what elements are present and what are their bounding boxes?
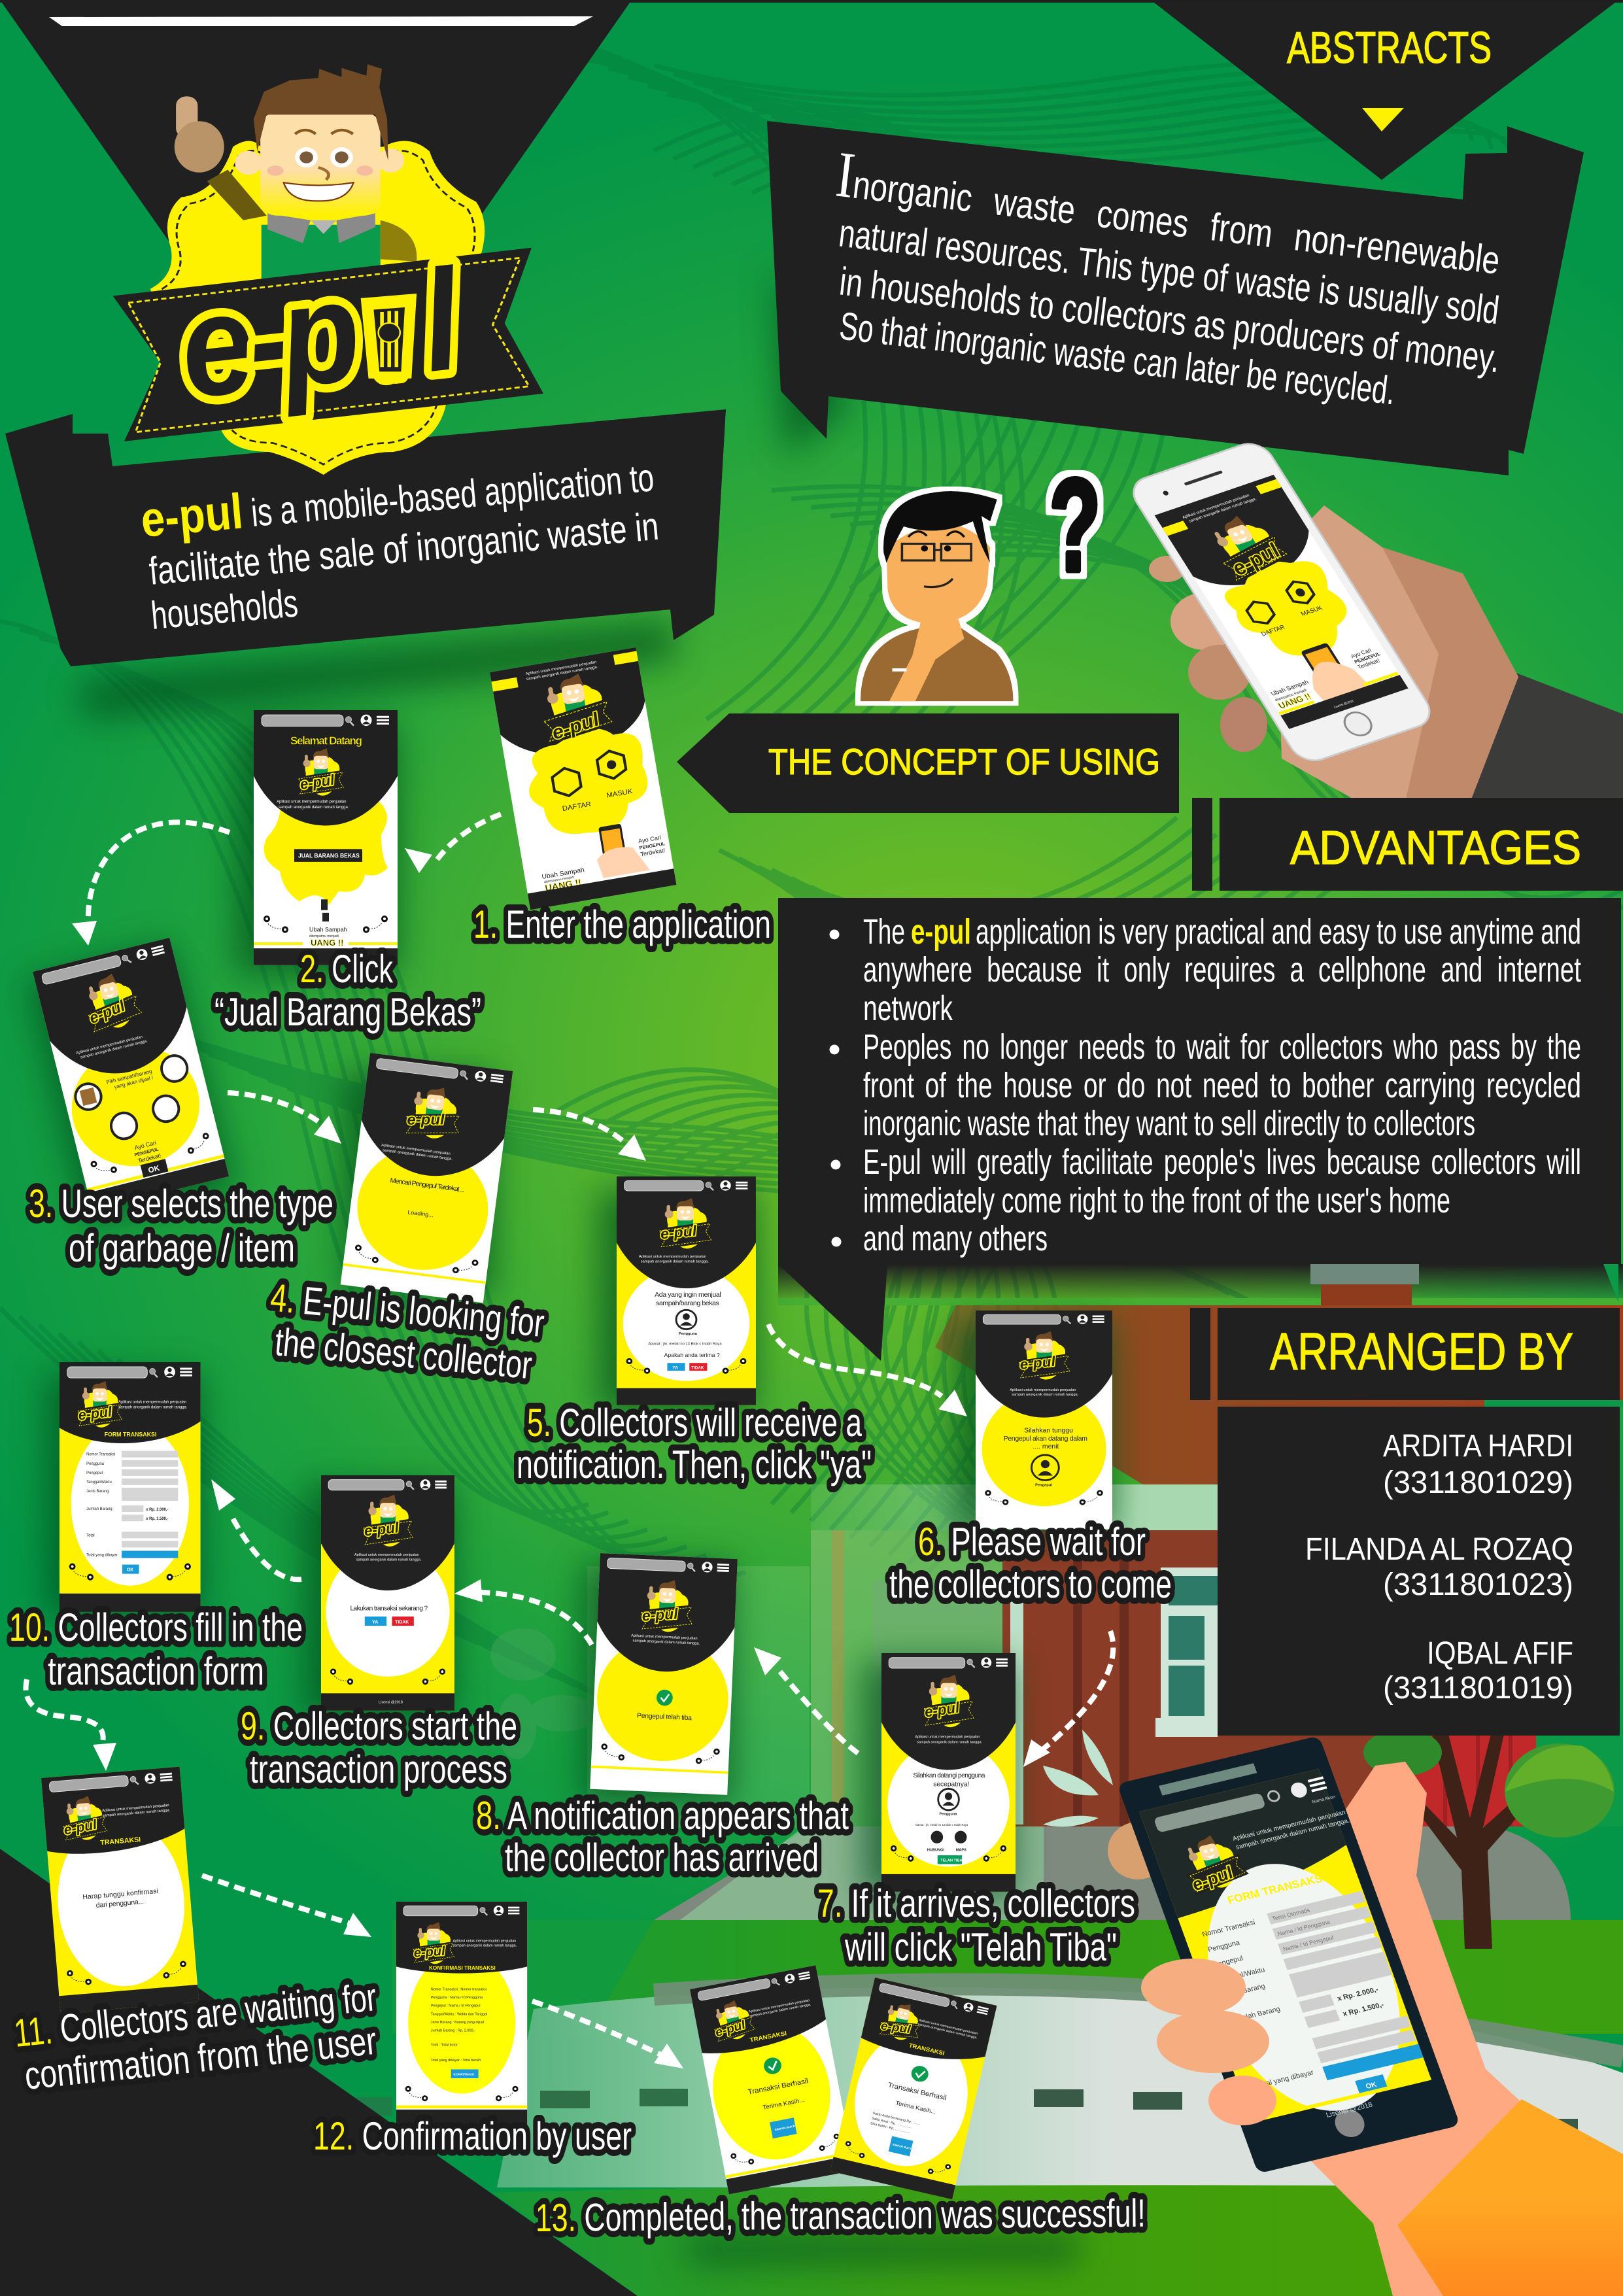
phone 13b: transaction success with balance screen: Sisa Saldo : Rp. ................ — [870, 2121, 910, 2134]
phone 9: start transaction screen: YA — [372, 1619, 379, 1624]
photo: hand holding smartphone: Lisensi @2018 — [1333, 699, 1355, 710]
phone 13b: transaction success with balance screen: Aplikasi untuk mempermudah penjualan — [918, 2019, 978, 2036]
phone 10: transaction form screen: Pengepul — [86, 1471, 103, 1475]
illustration: hand holding phone with transaction form: Jumlah Barang — [1232, 2005, 1282, 2024]
phone 12: user confirmation screen: Aplikasi untuk mempermudah penjualan — [453, 1939, 516, 1943]
heading: the concept of using: THE CONCEPT OF USING — [768, 741, 1160, 782]
phone 3: select item screen: Pilih sampah/barang — [106, 1069, 152, 1086]
phone 13b: transaction success with balance screen: Saldo Anda berkurang Rp. ........ — [872, 2112, 921, 2126]
step 5 label: notification. Then, click "ya" — [517, 1443, 872, 1486]
illustration: hand holding phone with transaction form: FORM TRANSAKSI — [1225, 1872, 1327, 1906]
phone 3: select item screen: Ayo Cari — [134, 1139, 157, 1151]
step 2 label: “Jual Barang Bekas” — [214, 990, 481, 1034]
phone 3: select item screen: sampah anorganik dalam rumah tangga. — [80, 1039, 148, 1060]
phone 11: waiting confirmation screen — [41, 1767, 199, 2013]
phone 5: collector notification screen: YA — [672, 1366, 678, 1370]
phone 10: transaction form screen: x Rp. 1.500,- — [146, 1517, 169, 1521]
phone 2: welcome screen: JUAL BARANG BEKAS — [298, 853, 360, 859]
phone 10: transaction form screen: FORM TRANSAKSI — [105, 1431, 156, 1438]
phone 10: transaction form screen: Jumlah Barang — [86, 1507, 112, 1511]
character: thinking man — [861, 491, 1014, 701]
phone 13b: transaction success with balance screen: Transaksi Berhasil — [887, 2082, 947, 2102]
illustration: hand holding phone with transaction form: Total yang dibayar — [1256, 2068, 1315, 2089]
illustration: hand holding phone with transaction form: Pengepul — [1212, 1955, 1244, 1969]
phone 11: waiting confirmation screen: Harap tunggu konfirmasi — [82, 1887, 158, 1901]
illustration: hand holding phone with transaction form: Lisensi @2018 — [1325, 2101, 1374, 2119]
phone 1: start screen: Aplikasi untuk mempermudah penjualan — [525, 660, 597, 676]
phone 4: searching screen — [341, 1053, 513, 1303]
phone 7: collector arrives screen: HUBUNGI — [927, 1848, 944, 1852]
illustration: hand holding phone with transaction form: Nomor Transaksi — [1201, 1919, 1256, 1938]
logo: e-pul mascot and ribbon — [113, 64, 543, 475]
phone 2: welcome screen: Selamat Datang — [290, 734, 362, 747]
phone 12: user confirmation screen: Total : Total kotor — [431, 2043, 458, 2047]
phone 6: please wait screen: e-pul — [1019, 1353, 1057, 1373]
heading: advantages — [1192, 798, 1623, 891]
photo: hand holding smartphone: Ayo Cari — [1349, 647, 1373, 659]
phone 4: searching screen: Mencari Pengepul Terdekat ... — [390, 1176, 465, 1194]
phone 1: start screen: Ubah Sampah — [541, 866, 585, 881]
phone 13a: transaction success screen: sampah anorganik dalam rumah tangga. — [749, 2003, 811, 2018]
phone 11: waiting confirmation screen: dari pengguna... — [95, 1898, 144, 1910]
illustration: hand holding phone with transaction form: Total — [1246, 2051, 1263, 2062]
step 10 label — [9, 1605, 303, 1693]
phone 13b: transaction success with balance screen: SIMPAN BUKTI — [892, 2143, 912, 2150]
heading: the concept of using — [677, 713, 1179, 813]
phone 10: transaction form screen: x Rp. 2.000,- — [146, 1508, 169, 1512]
logo wordmark: - — [237, 258, 301, 421]
panel: authors: IQBAL AFIF — [1427, 1636, 1573, 1671]
illustration: hand holding phone with transaction form: Terisi Otomatis — [1271, 1907, 1311, 1922]
illustration: hand holding phone with transaction form: Nama / Id Pengepul — [1282, 1934, 1335, 1952]
phone 12: user confirmation screen: Pengguna : Nama / Id Pengguna — [431, 1996, 483, 2000]
phone 7: collector arrives screen: sampah anorganik dalam rumah tangga. — [917, 1740, 983, 1744]
phone 7: collector arrives screen — [881, 1653, 1016, 1892]
step 8 label: 8. A notification appears that — [476, 1794, 849, 1838]
panel: abstracts heading triangle — [1154, 3, 1615, 180]
panel: authors: (3311801019) — [1383, 1671, 1573, 1705]
panel: authors: (3311801023) — [1383, 1568, 1573, 1602]
illustration: hand holding phone with transaction form: Pengguna — [1206, 1939, 1242, 1954]
icon: recycle bin — [361, 294, 417, 379]
phone 5: collector notification screen: Pengguna — [679, 1332, 698, 1336]
phone 13a: transaction success screen: Terima Kasih... — [762, 2097, 805, 2112]
step 3 label — [29, 1182, 333, 1270]
abstract text — [832, 138, 1505, 413]
phone 13b: transaction success with balance screen: e-pul — [880, 2019, 912, 2036]
panel: abstracts heading triangle: ABSTRACTS — [1287, 23, 1492, 73]
phone 13a: transaction success screen: Transaksi Berhasil — [747, 2078, 809, 2097]
phone 3: select item screen: Terdekat! — [137, 1152, 162, 1164]
phone 8: collector arrived notification screen: sampah anorganik dalam rumah tangga. — [632, 1639, 700, 1646]
phone 13b: transaction success with balance screen: Terima Kasih... — [895, 2100, 936, 2115]
phone 10: transaction form screen: Tanggal/Waktu — [86, 1481, 112, 1484]
phone 6: please wait screen: .... menit — [1033, 1444, 1059, 1450]
panel: advantages list — [778, 898, 1621, 1361]
phone 7: collector arrives screen: Aplikasi untuk mempermudah penjualan — [915, 1736, 980, 1739]
phone 10: transaction form screen: Total yang dibayar — [86, 1553, 118, 1558]
step 7 label — [817, 1881, 1135, 1969]
phone 12: user confirmation screen: sampah anorganik dalam rumah tangga. — [453, 1944, 517, 1948]
step 4 label: the closest collector — [273, 1320, 534, 1387]
illustration: hand holding phone with transaction form: Nama Akun — [1312, 1794, 1336, 1804]
step 4 label — [269, 1275, 546, 1387]
phone 3: select item screen: yang akan dijual ! — [114, 1074, 154, 1090]
illustration: hand holding phone with transaction form: x Rp. 2.000,- — [1337, 1985, 1380, 2003]
phone 5: collector notification screen: Aplikasi untuk mempermudah penjualan — [639, 1255, 706, 1259]
illustration: hand holding phone with transaction form: Jenis Barang — [1223, 1982, 1267, 1999]
photo: hand holding smartphone: MASUK — [1300, 604, 1324, 618]
step 11 label — [12, 1975, 379, 2098]
step 9 label: transaction process — [250, 1747, 507, 1791]
phone 11: waiting confirmation screen: TRANSAKSI — [100, 1836, 141, 1847]
phone 1: start screen: UANG !! — [544, 877, 582, 893]
phone 12: user confirmation screen: Pengepul : Nama / Id Pengepul — [431, 2004, 480, 2008]
photo: hand holding smartphone: Aplikasi untuk mempermudah penjualan — [1182, 493, 1251, 520]
phone 10: transaction form screen: sampah anorganik dalam rumah tangga. — [118, 1405, 188, 1409]
description text: e-pul — [139, 483, 245, 548]
phone 13a: transaction success screen: TRANSAKSI — [749, 2030, 787, 2044]
phone 10: transaction form screen: Pengguna — [86, 1462, 105, 1466]
phone 9: start transaction screen: Aplikasi untuk mempermudah penjualan — [354, 1553, 419, 1557]
arrows between steps — [26, 814, 1113, 2068]
step 9 label — [241, 1704, 517, 1791]
phone 3: select item screen: e-pul — [87, 998, 128, 1027]
phone 2: welcome screen: ditempatmu menjadi — [309, 934, 339, 938]
phone 9: start transaction screen: sampah anorganik dalam rumah tangga. — [356, 1558, 422, 1562]
panel: advantages list: and many others — [863, 1219, 1048, 1258]
description text: households — [149, 581, 299, 638]
phone 9: start transaction screen: TIDAK — [395, 1620, 409, 1624]
step 5 label: 5. Collectors will receive a — [527, 1401, 862, 1445]
panel: authors: FILANDA AL ROZAQ — [1305, 1532, 1573, 1567]
phone 6: please wait screen — [976, 1311, 1112, 1529]
step 9 label: 9. Collectors start the — [241, 1704, 517, 1748]
phone 1: start screen: e-pul — [549, 709, 602, 744]
panel: authors: ARDITA HARDI — [1383, 1429, 1573, 1464]
phone 13a: transaction success screen: Aplikasi untuk mempermudah penjualan — [748, 1998, 810, 2014]
panel: authors: (3311801029) — [1383, 1465, 1573, 1500]
illustration: hand holding phone with transaction form: Nama / Id Pengguna — [1276, 1919, 1331, 1937]
phone 10: transaction form screen: e-pul — [77, 1403, 113, 1423]
phone 2: welcome screen: UANG !! — [311, 938, 343, 948]
phone 6: please wait screen: Silahkan tunggu — [1024, 1428, 1073, 1434]
house and street scene — [347, 1264, 1623, 2296]
step 7 label: 7. If it arrives, collectors — [817, 1881, 1135, 1925]
phone 1: start screen: ditempatmu menjadi — [544, 876, 574, 884]
phone 12: user confirmation screen: KONFIRMASI — [453, 2072, 475, 2076]
phone 5: collector notification screen: e-pul — [660, 1222, 698, 1242]
phone 6: please wait screen: Pengepul akan datang dalam — [1004, 1435, 1087, 1443]
photo: hand holding smartphone: Terdekat! — [1356, 657, 1381, 670]
description text — [139, 455, 660, 638]
phone 5: collector notification screen: sampah/barang bekas — [656, 1300, 719, 1307]
phone 12: user confirmation screen: Jenis Barang : Barang yang dijual — [431, 2021, 484, 2025]
phone 3: select item screen: PENGEPUL — [134, 1147, 159, 1157]
phone 9: start transaction screen — [321, 1475, 454, 1711]
abstract text: So that inorganic waste can later be recycled. — [837, 303, 1397, 413]
phone 10: transaction form screen — [60, 1362, 201, 1612]
photo: hand holding smartphone: DAFTAR — [1260, 624, 1286, 638]
phone 10: transaction form screen: OK — [127, 1568, 133, 1573]
photo: hand holding smartphone: UANG !! — [1276, 691, 1313, 711]
phone 5: collector notification screen: Apakah anda terima ? — [664, 1352, 720, 1358]
phone 2: welcome screen: Ubah Sampah — [309, 926, 347, 933]
illustration: hand holding phone with transaction form — [1108, 1736, 1623, 2296]
phone 4: searching screen: Aplikasi untuk mempermudah penjualan — [381, 1144, 451, 1156]
phone 12: user confirmation screen: KONFIRMASI TRANSAKSI — [429, 1965, 496, 1971]
panel: authors — [1218, 1407, 1620, 1736]
icon: question mark: ? — [1050, 453, 1101, 598]
phone 10: transaction form screen: Total — [86, 1534, 95, 1537]
phone 2: welcome screen — [254, 710, 398, 965]
logo wordmark: u — [371, 328, 408, 388]
illustration: hand holding phone with transaction form: OK — [1365, 2081, 1378, 2091]
phone 13b: transaction success with balance screen: sampah anorganik dalam rumah tangga. — [917, 2023, 978, 2040]
illustration: hand holding phone with transaction form: Aplikasi untuk mempermudah penjualan — [1232, 1809, 1346, 1843]
description text: is a mobile-based application to — [249, 455, 656, 535]
phone 8: collector arrived notification screen: Aplikasi untuk mempermudah penjualan — [631, 1634, 698, 1641]
phone 13a: transaction success screen: SIMPAN BUKTI — [774, 2125, 795, 2131]
phone 13b: transaction success with balance screen: TRANSAKSI — [908, 2042, 945, 2057]
illustration: hand holding phone with transaction form: sampah anorganik dalam rumah tangga. — [1235, 1817, 1350, 1851]
step 11 label: 11. Collectors are waiting for — [12, 1975, 378, 2055]
illustration: hand holding phone with transaction form: Tanggal/Waktu — [1218, 1966, 1266, 1984]
photo: hand holding smartphone: PENGEPUL — [1353, 651, 1382, 665]
phone 2: welcome screen: Aplikasi untuk mempermudah penjualan — [277, 800, 346, 804]
step 7 label: will click "Telah Tiba" — [844, 1925, 1117, 1969]
phone 3: select item screen: OK — [147, 1163, 161, 1175]
phone 6: please wait screen: sampah anorganik dalam rumah tangga. — [1012, 1393, 1079, 1397]
phone 1: start screen: DAFTAR — [562, 800, 592, 813]
phone 5: collector notification screen: Alamat : jln. melati no 13 Blok c Indah Raya — [648, 1343, 722, 1346]
phone 13b: transaction success with balance screen: Saldo Awal : Rp. ................ — [871, 2117, 912, 2129]
phone 5: collector notification screen: TIDAK — [691, 1366, 704, 1370]
step labels — [9, 902, 1172, 2240]
illustration: hand holding phone with transaction form: e-pul — [1189, 1862, 1237, 1894]
phone 13b: transaction success with balance screen — [830, 1978, 997, 2199]
phone 8: collector arrived notification screen: e-pul — [641, 1605, 679, 1624]
phone 12: user confirmation screen: e-pul — [413, 1944, 446, 1961]
phone 5: collector notification screen: sampah anorganik dalam rumah tangga. — [641, 1260, 709, 1264]
phone 11: waiting confirmation screen: sampah anorganik dalam rumah tangga. — [103, 1809, 171, 1818]
step 2 label — [214, 947, 481, 1034]
phone 7: collector arrives screen: Silahkan datangi pengguna — [913, 1772, 985, 1779]
illustration: hand holding phone with transaction form: x Rp. 1.500,- — [1342, 2001, 1385, 2018]
phone 5: collector notification screen: Ada yang ingin menjual — [655, 1292, 721, 1299]
phone 3: select item screen: Aplikasi untuk mempermudah penjualan — [76, 1035, 143, 1055]
logo wordmark: e — [170, 262, 264, 428]
photo: hand holding smartphone: sampah anorganik dalam rumah tangga. — [1188, 496, 1257, 524]
step 8 label: the collector has arrived — [505, 1836, 819, 1879]
step 4 label: 4. E-pul is looking for — [269, 1275, 546, 1345]
phone 7: collector arrives screen: TELAH TIBA — [940, 1859, 963, 1863]
phone 1: start screen — [490, 647, 676, 910]
phone 7: collector arrives screen: secepatnya! — [933, 1781, 969, 1789]
soft shadows — [26, 262, 1112, 2263]
phone 4: searching screen: sampah anorganik dalam rumah tangga. — [383, 1148, 453, 1161]
phone 1: start screen: Ayo Cari — [638, 834, 662, 844]
step 1 label: 1. Enter the application — [473, 902, 771, 946]
description text: facilitate the sale of inorganic waste in — [147, 504, 660, 593]
phone 10: transaction form screen: Jenis Barang — [86, 1490, 109, 1494]
phone 1: start screen: PENGEPUL — [639, 842, 666, 851]
step 10 label: 10. Collectors fill in the — [9, 1605, 303, 1649]
step 2 label: 2. Click — [300, 947, 394, 991]
panel: abstract text ribbon — [767, 121, 1584, 475]
phone 1: start screen: Terdekat! — [640, 847, 666, 857]
step 6 label: 6. Please wait for — [918, 1520, 1146, 1564]
phone 7: collector arrives screen: Alamat : jln. melati no 13 Blok c Indah Raya — [915, 1823, 968, 1826]
phone 10: transaction form screen: Nomor Transaksi — [86, 1453, 115, 1457]
phone 6: please wait screen: Pengepul — [1035, 1484, 1052, 1487]
step 3 label: 3. User selects the type — [29, 1182, 333, 1225]
phone 2: welcome screen: e-pul — [299, 771, 335, 793]
phone 6: please wait screen: Aplikasi untuk mempermudah penjualan — [1010, 1388, 1076, 1392]
panel: advantages list: The — [863, 912, 905, 951]
phone 12: user confirmation screen — [396, 1902, 527, 2126]
phone 1: start screen: MASUK — [606, 787, 634, 800]
phone 7: collector arrives screen: MAPS — [956, 1848, 966, 1852]
phone 4: searching screen: e-pul — [407, 1111, 445, 1127]
phone 7: collector arrives screen: e-pul — [923, 1698, 961, 1721]
step 12 label: 12. Confirmation by user — [313, 2114, 632, 2158]
logo wordmark: p — [266, 250, 370, 418]
phone 5: collector notification screen — [617, 1176, 756, 1405]
photo: hand holding smartphone: e-pul — [1227, 539, 1286, 580]
step 8 label — [476, 1794, 849, 1879]
phone 9: start transaction screen: e-pul — [364, 1519, 400, 1539]
phone 12: user confirmation screen: Total yang dibayar : Total bersih — [431, 2059, 481, 2063]
phone 8: collector arrived notification screen: Pengepul telah tiba — [637, 1713, 692, 1722]
step 10 label: transaction form — [48, 1649, 264, 1693]
phone 2: welcome screen: sampah anorganik dalam rumah tangga. — [279, 806, 349, 810]
phone 12: user confirmation screen: Nomor Transaksi : Nomor transaksi — [431, 1987, 487, 1991]
phone 4: searching screen: Loading... — [407, 1208, 434, 1218]
step 11 label: confirmation from the user — [23, 2019, 379, 2098]
step 6 label: the collectors to come — [889, 1562, 1172, 1606]
phone 9: start transaction screen: Lisensi @2018 — [379, 1700, 403, 1705]
phone 11: waiting confirmation screen: Aplikasi untuk mempermudah penjualan — [102, 1804, 169, 1813]
phone 7: collector arrives screen: Pengguna — [940, 1813, 957, 1817]
heading: advantages: ADVANTAGES — [1290, 822, 1581, 874]
photo: hand holding smartphone: ditempatmu menjadi — [1274, 689, 1308, 702]
panel: e-pul description ribbon — [5, 409, 726, 666]
panel: top-left dark triangle — [0, 0, 632, 451]
phone 10: transaction form screen: Aplikasi untuk mempermudah penjualan — [118, 1400, 186, 1404]
panel: advantages list: network — [863, 989, 953, 1028]
step 5 label — [517, 1401, 872, 1486]
step 6 label — [889, 1520, 1172, 1606]
phone 11: waiting confirmation screen: e-pul — [63, 1817, 99, 1838]
heading: arranged by — [1190, 1308, 1620, 1400]
phone 13a: transaction success screen — [690, 1965, 855, 2195]
phone 3: select item screen — [33, 938, 229, 1210]
panel: bottom-left dark triangle — [0, 1849, 638, 2296]
photo: hand holding smartphone: Ubah Sampah — [1270, 679, 1310, 698]
phone 12: user confirmation screen: Jumlah Barang : Rp. 2.000,- — [431, 2029, 475, 2033]
phone 8: collector arrived notification screen — [590, 1553, 738, 1795]
phone 12: user confirmation screen: Tanggal/Waktu : Waktu dan Tanggal — [431, 2012, 487, 2016]
phone 9: start transaction screen: Lakukan transaksi sekarang ? — [350, 1605, 428, 1612]
phone 13a: transaction success screen: e-pul — [713, 2018, 747, 2040]
step 13 label: 13. Completed, the transaction was successful! — [536, 2191, 1146, 2240]
step 3 label: of garbage / item — [69, 1226, 295, 1270]
panel: advantages list: e-pul — [911, 912, 971, 951]
phone 1: start screen: sampah anorganik dalam rumah tangga. — [526, 665, 598, 681]
photo: hand holding smartphone — [1125, 438, 1623, 801]
logo wordmark: l — [412, 239, 471, 402]
